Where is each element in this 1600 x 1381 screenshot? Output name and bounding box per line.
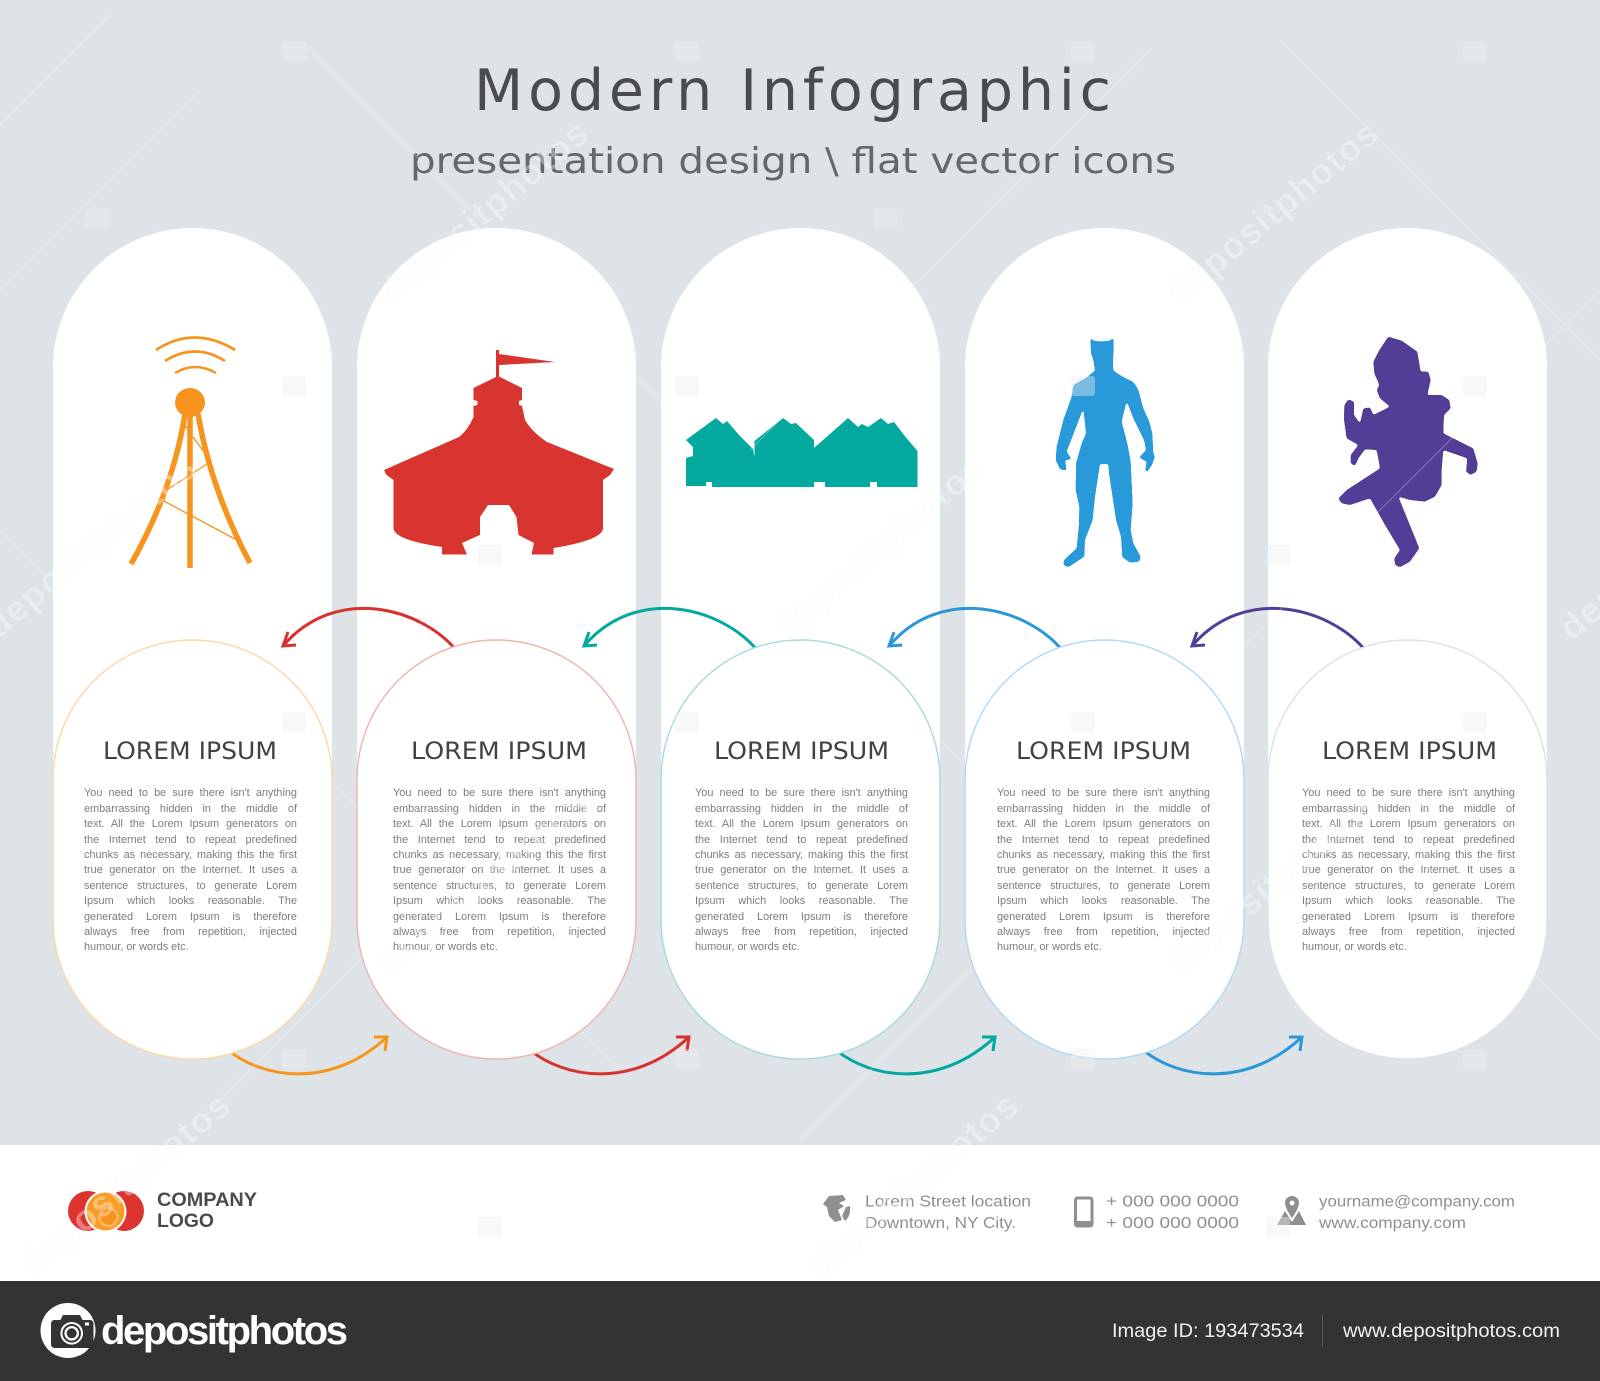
arrow: red, lower <box>530 1037 689 1074</box>
body text 4: generated Lorem Ipsum is therefore <box>997 911 1210 923</box>
body text 4: You need to be sure there isn't anything <box>997 787 1210 799</box>
panel: arch 2 <box>357 228 636 800</box>
body text 2: chunks as necessary, making this the first <box>393 849 606 861</box>
body text 2: embarrassing hidden in the middle of <box>393 803 606 815</box>
watermark: depositphotos repeats: depositphotos <box>799 1084 1026 1284</box>
body text 3: embarrassing hidden in the middle of <box>695 803 908 815</box>
body text 2: always free from repetition, injected <box>393 926 606 938</box>
body text 3: You need to be sure there isn't anything <box>695 787 908 799</box>
body text 5: true generator on the Internet. It uses a <box>1302 864 1515 876</box>
footer band <box>0 1145 1600 1281</box>
panel: text oval 5 <box>1268 640 1547 1059</box>
title: Modern Infographic <box>474 58 1111 124</box>
watermark: depositphotos repeats: depositphotos <box>11 1084 238 1284</box>
icon: globe <box>823 1195 850 1222</box>
body text 2: generated Lorem Ipsum is therefore <box>393 911 606 923</box>
body text 3: chunks as necessary, making this the first <box>695 849 908 861</box>
body text 4: Ipsum which looks reasonable. The <box>997 895 1210 907</box>
body text 2: the Internet tend to repeat predefined <box>393 834 606 846</box>
heading 5: LOREM IPSUM <box>1322 737 1497 765</box>
body text 2: humour, or words etc. <box>393 941 498 953</box>
body text 5: chunks as necessary, making this the first <box>1302 849 1515 861</box>
contact text: www.company.com <box>1318 1215 1466 1232</box>
body text 3: always free from repetition, injected <box>695 926 908 938</box>
body text 1: true generator on the Internet. It uses a <box>84 864 297 876</box>
body text 4: sentence structures, to generate Lorem <box>997 880 1210 892</box>
body text 1: humour, or words etc. <box>84 941 189 953</box>
body text 4: always free from repetition, injected <box>997 926 1210 938</box>
icon: depositphotos camera logo <box>40 1303 96 1358</box>
arrow: blue, lower <box>1143 1037 1302 1074</box>
heading 3: LOREM IPSUM <box>714 737 889 765</box>
body text 1: You need to be sure there isn't anything <box>84 787 297 799</box>
phone text: + 000 000 0000 <box>1106 1215 1239 1232</box>
body text 3: Ipsum which looks reasonable. The <box>695 895 908 907</box>
subtitle: presentation design \ flat vector icons <box>410 141 1176 182</box>
address text <box>865 1194 1031 1232</box>
body text 4: chunks as necessary, making this the first <box>997 849 1210 861</box>
panel: text oval 1 <box>53 640 332 1059</box>
body text 1: generated Lorem Ipsum is therefore <box>84 911 297 923</box>
body text 3 <box>695 787 908 953</box>
panel: arch 3 <box>661 228 940 800</box>
body text 4: humour, or words etc. <box>997 941 1102 953</box>
icon: phone <box>1075 1198 1093 1227</box>
contact text <box>1318 1194 1515 1232</box>
watermark: depositphotos repeats: depositphotos <box>369 782 596 982</box>
watermark: depositphotos repeats: depositphotos <box>369 112 596 312</box>
arrow: blue, upper <box>889 608 1062 650</box>
body text 3: sentence structures, to generate Lorem <box>695 880 908 892</box>
body text 4: the Internet tend to repeat predefined <box>997 834 1210 846</box>
panel: text oval 3 <box>661 640 940 1059</box>
body text 2: text. All the Lorem Ipsum generators on <box>393 818 606 830</box>
company name <box>157 1190 257 1232</box>
icon: map pin <box>1277 1196 1306 1225</box>
body text 5: the Internet tend to repeat predefined <box>1302 834 1515 846</box>
body text 1: chunks as necessary, making this the first <box>84 849 297 861</box>
body text 5: You need to be sure there isn't anything <box>1302 787 1515 799</box>
icon: dancing child figure <box>1338 337 1478 567</box>
body text 5: humour, or words etc. <box>1302 941 1407 953</box>
company name: COMPANY <box>157 1190 257 1211</box>
heading 2: LOREM IPSUM <box>411 737 587 765</box>
panel: text oval 2 <box>357 640 636 1059</box>
body text 2: true generator on the Internet. It uses a <box>393 864 606 876</box>
dark credit bar <box>0 1281 1600 1381</box>
body text 3: generated Lorem Ipsum is therefore <box>695 911 908 923</box>
body text 2: You need to be sure there isn't anything <box>393 787 606 799</box>
address text: Downtown, NY City. <box>865 1215 1016 1232</box>
body text 4 <box>997 787 1210 953</box>
arrow: purple, upper <box>1192 608 1365 650</box>
depositphotos wordmark: depositphotos <box>101 1309 348 1353</box>
address text: Lorem Street location <box>865 1194 1031 1210</box>
body text 4: text. All the Lorem Ipsum generators on <box>997 818 1210 830</box>
arrow: teal, upper <box>584 608 757 650</box>
icon: circus tent <box>384 350 614 554</box>
watermark: depositphotos repeats: depositphotos <box>765 446 992 646</box>
body text 2 <box>393 787 606 953</box>
phone text: + 000 000 0000 <box>1106 1194 1239 1210</box>
watermark: camera marks <box>85 41 1487 1237</box>
body text 5: always free from repetition, injected <box>1302 926 1515 938</box>
panel: arch 5 <box>1268 228 1547 800</box>
arrow: teal, lower <box>836 1037 995 1074</box>
body text 1 <box>84 787 298 953</box>
contact text: yourname@company.com <box>1319 1194 1515 1210</box>
body text 1: text. All the Lorem Ipsum generators on <box>84 818 297 830</box>
heading 4: LOREM IPSUM <box>1016 737 1191 765</box>
body text 4: true generator on the Internet. It uses a <box>997 864 1210 876</box>
panel: arch 1 <box>53 228 332 800</box>
icon: company logo mark <box>68 1190 144 1232</box>
panel: arch 4 <box>965 228 1244 800</box>
body text 1: the Internet tend to repeat predefined <box>84 834 297 846</box>
website: www.depositphotos.com <box>1342 1320 1560 1342</box>
body text 5: embarrassing hidden in the middle of <box>1302 803 1515 815</box>
icon: superhero figure <box>1056 337 1155 567</box>
body text 3: the Internet tend to repeat predefined <box>695 834 908 846</box>
company name: LOGO <box>157 1211 214 1232</box>
phone text <box>1106 1194 1239 1232</box>
body text 3: text. All the Lorem Ipsum generators on <box>695 818 908 830</box>
body text 3: true generator on the Internet. It uses a <box>695 864 908 876</box>
image id: Image ID: 193473534 <box>1112 1320 1304 1342</box>
body text 5: generated Lorem Ipsum is therefore <box>1302 911 1515 923</box>
arrow: orange, lower <box>228 1037 387 1074</box>
body text 5: sentence structures, to generate Lorem <box>1302 880 1515 892</box>
body text 1: always free from repetition, injected <box>84 926 297 938</box>
body text 1: sentence structures, to generate Lorem <box>84 880 297 892</box>
arrow: red, upper <box>283 608 456 650</box>
watermark: depositphotos repeats: depositphotos <box>1159 782 1386 982</box>
body text 2: Ipsum which looks reasonable. The <box>393 895 606 907</box>
body text 3: humour, or words etc. <box>695 941 800 953</box>
body text 1: Ipsum which looks reasonable. The <box>84 895 297 907</box>
icon: row of houses <box>686 418 918 487</box>
body text 5: Ipsum which looks reasonable. The <box>1302 895 1515 907</box>
body text 5 <box>1302 787 1516 953</box>
body text 5: text. All the Lorem Ipsum generators on <box>1302 818 1515 830</box>
watermark: depositphotos repeats: depositphotos <box>1159 112 1386 312</box>
heading 1: LOREM IPSUM <box>103 737 277 765</box>
body text 4: embarrassing hidden in the middle of <box>997 803 1210 815</box>
body text 1: embarrassing hidden in the middle of <box>84 803 297 815</box>
panel: text oval 4 <box>965 640 1244 1059</box>
icon: antenna tower <box>131 338 250 568</box>
body text 2: sentence structures, to generate Lorem <box>393 880 606 892</box>
